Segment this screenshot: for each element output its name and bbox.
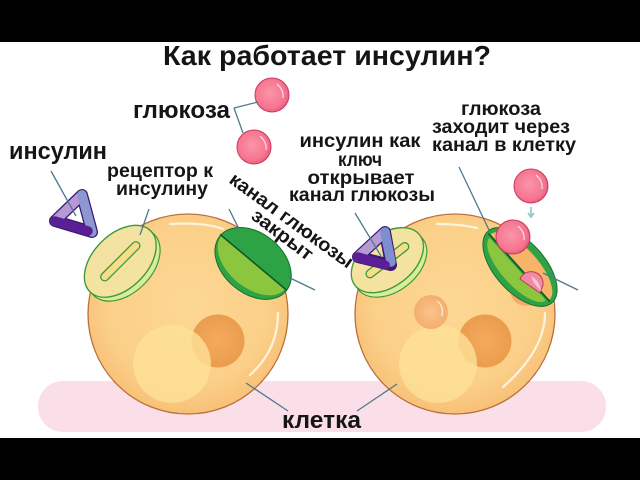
label: инсулин как ключ открывает канал глюкозы: канал глюкозы bbox=[289, 185, 435, 206]
label: глюкоза заходит через канал в клетку: глюкоза bbox=[461, 99, 541, 120]
label: канал глюкозы закрыт: канал глюкозы bbox=[225, 169, 357, 273]
label: рецептор к инсулину bbox=[107, 161, 214, 200]
label: глюкоза заходит через канал в клетку: канал в клетку bbox=[432, 135, 576, 156]
vacuole bbox=[399, 325, 477, 403]
label: инсулин как ключ открывает канал глюкозы: инсулин как bbox=[300, 131, 421, 152]
vacuole bbox=[133, 325, 211, 403]
glucose passing through channel bbox=[520, 272, 543, 293]
label: инсулин: инсулин bbox=[9, 138, 107, 165]
nucleus bbox=[192, 314, 244, 368]
right open glucose channel bbox=[469, 215, 571, 319]
right insulin triangle bbox=[358, 232, 391, 265]
left cell: closed channel bbox=[88, 214, 288, 414]
label: рецептор к инсулину: инсулину bbox=[116, 179, 208, 200]
right receptor bbox=[339, 214, 439, 311]
label: инсулин как ключ открывает канал глюкозы: открывает bbox=[308, 168, 414, 189]
left receptor bbox=[71, 212, 174, 315]
title: Как работает инсулин? bbox=[163, 40, 491, 71]
glucose molecule lower bbox=[237, 130, 271, 164]
bottom black bar bbox=[0, 438, 640, 480]
label: клетка: клетка bbox=[282, 407, 362, 434]
right cell: open channel bbox=[355, 214, 555, 414]
receptor slot bbox=[364, 241, 410, 279]
label: глюкоза заходит через канал в клетку bbox=[432, 99, 576, 156]
label: канал глюкозы закрыт: закрыт bbox=[247, 205, 317, 265]
glucose molecule top bbox=[255, 78, 289, 112]
label: глюкоза left: глюкоза bbox=[133, 97, 231, 124]
glucose molecule above channel bbox=[514, 169, 548, 203]
glucose molecule entering channel bbox=[496, 220, 530, 254]
label: глюкоза заходит через канал в клетку: заходит через bbox=[432, 117, 570, 138]
nucleus bbox=[458, 314, 512, 368]
left insulin triangle bbox=[55, 195, 92, 232]
arrow: glucose moving down bbox=[528, 207, 534, 217]
top black bar bbox=[0, 0, 640, 42]
left closed glucose channel bbox=[200, 212, 305, 314]
leader lines bbox=[51, 102, 578, 411]
label: инсулин как ключ открывает канал глюкозы: ключ bbox=[338, 150, 382, 171]
background band: pink tissue bbox=[38, 381, 606, 432]
vesicle bbox=[414, 295, 448, 329]
label: инсулин как ключ открывает канал глюкозы bbox=[289, 131, 435, 206]
receptor slot bbox=[99, 240, 142, 283]
label: рецептор к инсулину: рецептор к bbox=[107, 161, 214, 182]
